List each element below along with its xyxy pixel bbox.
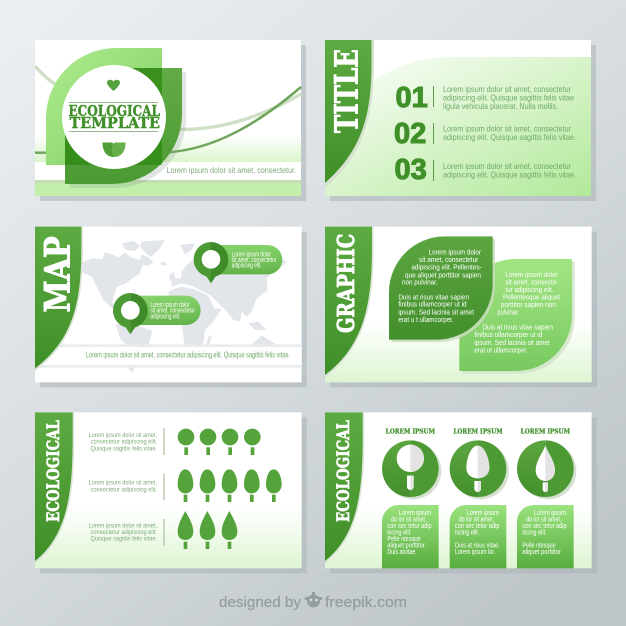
list item 02: 02 [394, 118, 426, 150]
leaf: light green text block: Duis at risus vitae sapien [482, 325, 553, 332]
tab: map [35, 227, 81, 368]
icon: two leaves [102, 142, 126, 157]
text block: row 2: consectetur adipiscing elit. [91, 486, 157, 493]
tab: title [325, 40, 372, 183]
list item 01: Lorem ipsum dolor sit amet, consectetur [443, 85, 571, 94]
list item 02: Lorem ipsum dolor sit amet, consectetur [443, 124, 571, 134]
tab: map: MAP [38, 236, 78, 312]
leaf: light green text block: Lorem ipsum dolor [505, 272, 558, 279]
footer: freepik credit: freepik.com [325, 594, 407, 611]
text block: row 3 [89, 522, 157, 543]
callout: pin north: sit amet, consectetur [232, 257, 277, 264]
leaf: light green text block: pulvinar. [497, 310, 519, 317]
column 2: Lorem ipsum lor. [455, 549, 495, 556]
leaf: dark green text block: erat u t ullamcorper. [398, 317, 454, 324]
column 2: iscing elit. [455, 530, 479, 537]
callout: pin north: Lorem ipsum dolor [232, 251, 271, 258]
text block: row 1: consectetur adipiscing elit. [91, 439, 157, 446]
list item 03: Lorem ipsum dolor sit amet, consectetur [443, 162, 571, 171]
list item 01: 01 [396, 82, 428, 114]
leaf: dark green text block: ipsum. Sed lacinia sit amet [398, 310, 474, 317]
text block: row 1: Quisque sagittis felis vitae. [91, 445, 157, 452]
list item 01: adipiscing elit. Quisque sagittis felis vitae [443, 94, 574, 102]
column 3 [517, 427, 576, 568]
callout: pin south [113, 293, 201, 334]
column 1 [382, 427, 441, 568]
column 3: iscing elit. [522, 530, 547, 537]
caption: Lorem ipsum dolor sit amet, consectetur adipiscing elit. Quisque sagittis felis vitae. [86, 350, 290, 360]
column 1: Lorem ipsum [399, 510, 431, 517]
caption: Lorem ipsum dolor sit amet, consectetur. [166, 165, 296, 175]
leaf: dark green text block: Duis at risus vitae sapien [398, 294, 469, 301]
tab: ecological [325, 412, 363, 561]
tab: ecological: ECOLOGICAL [43, 420, 63, 522]
leaf: dark green text block: finibus ullamcorper ut id [398, 302, 467, 309]
column 3: aliquet porttitor [522, 549, 562, 556]
callout: pin north [194, 242, 282, 283]
leaf: light green text block: sit amet, consecte- [505, 280, 559, 287]
column 1: con sec tetur adip [387, 523, 432, 530]
leaf: light green text block [459, 259, 575, 374]
leaf: dark green text block: que aliquet porttitor sapien [405, 272, 481, 279]
column 2: do lor sit amet, [459, 516, 494, 523]
panel: title list [325, 40, 596, 201]
icon: freepik mascot [304, 592, 322, 608]
icons: oval trees [178, 469, 282, 502]
column 2: Duis at risus vitae. [455, 543, 500, 550]
panel: ecological tree rows [35, 412, 307, 573]
column 2: con sec tetur adip [455, 523, 499, 530]
text block: row 2: Lorem ipsum dolor sit amet, [89, 480, 157, 487]
callout: pin north: adipiscing elit. [232, 263, 262, 270]
text block: row 2 [89, 480, 157, 493]
column 1: LOREM IPSUM [386, 427, 436, 435]
leaf: light green text block: Pellentesque aliquet [503, 295, 560, 302]
footer: freepik credit: designed by [219, 594, 301, 611]
heading: ecological template [68, 102, 160, 132]
column 2: Lorem ipsum [467, 510, 499, 517]
icons: pointed trees [178, 511, 237, 549]
leaf: dark green text block: non pulvinar. [402, 279, 438, 286]
list item 01 [396, 82, 574, 114]
leaf: dark green text block [389, 236, 495, 342]
column 3: Lorem ipsum [534, 510, 566, 517]
list item 02: adipiscing elit. Quisque sagittis felis vitae. [443, 133, 576, 142]
icons: round trees [178, 429, 261, 455]
leaf: dark green text block: Lorem ipsum dolor [429, 249, 482, 256]
tab: ecological: ECOLOGICAL [333, 420, 353, 522]
text block: row 3: consectetur adipiscing elit. [91, 529, 157, 536]
column 3: LOREM IPSUM [521, 427, 571, 435]
list item 03 [394, 154, 576, 186]
list item 02 [394, 118, 576, 150]
world map [82, 240, 287, 373]
icon: heart [107, 80, 120, 91]
tab: graphic: GRAPHIC [332, 234, 360, 333]
text block: row 3: Lorem ipsum dolor sit amet, [89, 522, 157, 529]
text block: row 1: Lorem ipsum dolor sit amet, [89, 432, 157, 439]
column 1: iscing elit. [387, 530, 412, 537]
text block: row 3: Quisque sagittis felis vitae. [91, 536, 157, 543]
tab: graphic [325, 227, 372, 375]
text block: row 1 [89, 432, 157, 452]
column 1: do lor sit amet, [391, 516, 426, 523]
column 3: do lor sit amet, [526, 516, 561, 523]
panel: ecological template cover [35, 40, 306, 201]
leaf: light green text block: tur adipiscing elit. [505, 287, 554, 294]
column 1: Duis atvitae. [387, 549, 417, 556]
callout: pin south: adipiscing elit. [150, 313, 180, 320]
footer: freepik credit [219, 592, 407, 611]
tab: title: TITLE [328, 49, 366, 133]
column 2: LOREM IPSUM [453, 427, 503, 435]
leaf: light green text block: porttitor sapien non [501, 302, 556, 309]
panel: ecological columns [325, 412, 597, 573]
leaf: light green text block: finibus ullamcorper ut id [474, 332, 542, 339]
callout: pin south: Lorem ipsum dolor [150, 302, 190, 309]
tab: ecological [35, 412, 73, 561]
callout: pin south: sit amet, consectetur [150, 308, 195, 315]
leaf: light green text block: erat ut ullamcorper. [474, 347, 528, 354]
column 1: aliquet porttitor. [387, 543, 426, 550]
panel: map [35, 227, 307, 387]
leaf: dark green text block: sit amet, consectetur [419, 257, 479, 264]
leaf: dark green text block: adipiscing elit. Pellentes- [411, 264, 482, 271]
column 2 [450, 427, 509, 568]
heading: ecological template: TEMPLATE [70, 114, 160, 132]
column 1: Pelle ntesque [387, 536, 421, 543]
leaf: light green text block: ipsum. Sed lacinia sit amet [474, 340, 550, 347]
list item 03: adipiscing elit. Quisque sagittis felis vitae. [443, 170, 576, 180]
list item 03: 03 [394, 154, 427, 186]
column 3: con sec tetur adip [522, 523, 567, 530]
panel: graphic [325, 227, 597, 387]
emblem: overlapping leaf shapes with title [46, 48, 186, 188]
list item 01: ligula vehicula placerat. Nulla mollis. [443, 102, 558, 111]
heading: ecological template: ECOLOGICAL [68, 102, 160, 120]
column 3: Pelle ntesque [522, 543, 556, 550]
